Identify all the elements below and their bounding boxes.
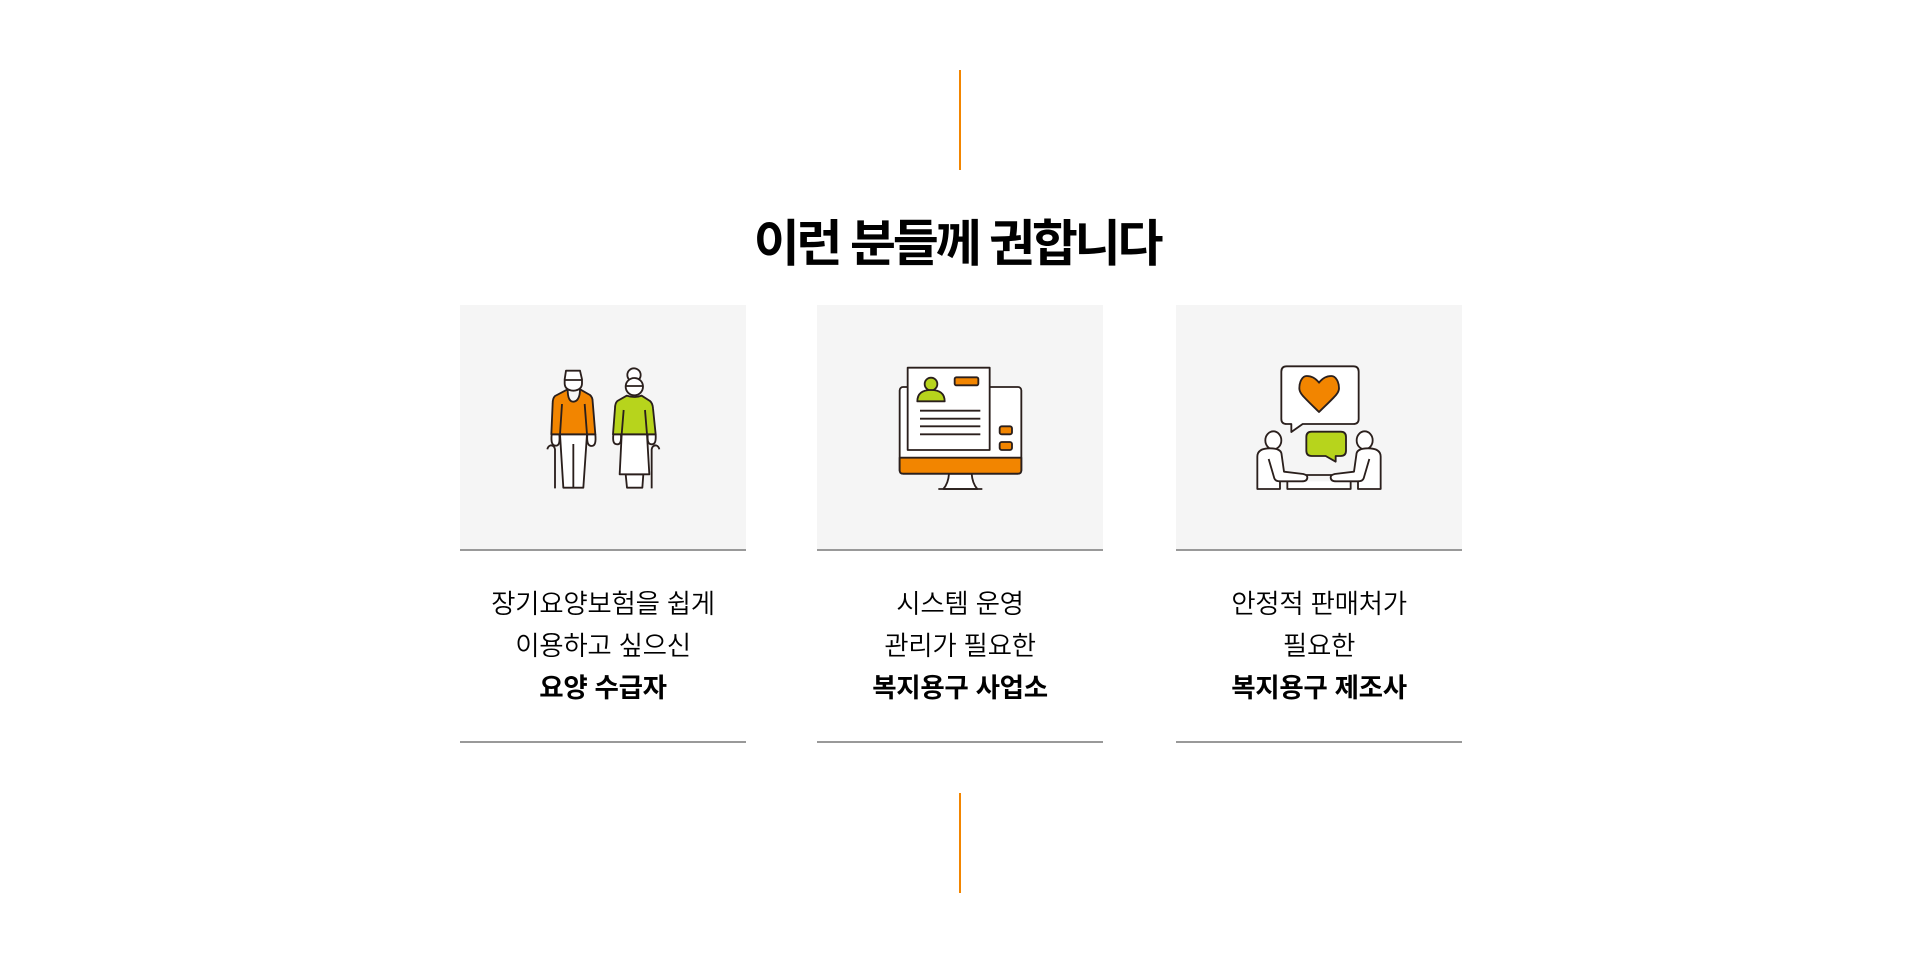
icon: two people talking with speech bubbles <box>1256 365 1382 490</box>
bottom orange accent line <box>959 793 961 893</box>
description text <box>491 589 715 703</box>
description text <box>872 589 1048 703</box>
description text: 복지용구 제조사 <box>1231 673 1407 703</box>
icon: desktop monitor with profile document <box>898 366 1022 490</box>
description text: 시스템 운영 <box>896 589 1024 619</box>
description text: 요양 수급자 <box>539 673 667 703</box>
title: 이런 분들께 권합니다 <box>754 216 1160 272</box>
icon: elderly man and woman with canes <box>546 367 660 489</box>
panel: welfare equipment manufacturer <box>1176 305 1462 743</box>
panel: welfare equipment business <box>817 305 1103 743</box>
description text <box>1231 589 1407 703</box>
description text: 이용하고 싶으신 <box>515 631 691 661</box>
description text: 복지용구 사업소 <box>872 673 1048 703</box>
illustration box: conversation <box>1176 305 1462 551</box>
panel: care recipients <box>460 305 746 743</box>
description text: 장기요양보험을 쉽게 <box>491 589 715 619</box>
top orange accent line <box>959 70 961 170</box>
description text: 안정적 판매처가 <box>1231 589 1407 619</box>
illustration box: elderly couple <box>460 305 746 551</box>
description text: 관리가 필요한 <box>884 631 1036 661</box>
description text: 필요한 <box>1283 631 1355 661</box>
illustration box: monitor <box>817 305 1103 551</box>
